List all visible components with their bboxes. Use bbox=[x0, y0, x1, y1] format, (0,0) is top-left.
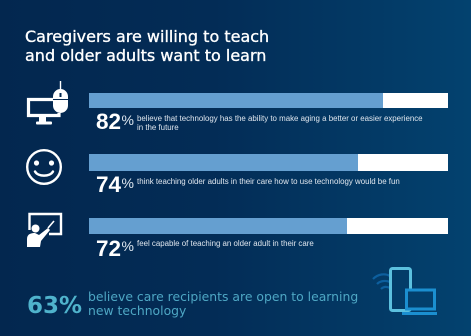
stat row 3 bbox=[89, 218, 448, 260]
callout text: new technology bbox=[88, 303, 186, 318]
stat row 2 bbox=[89, 154, 448, 197]
description bbox=[137, 114, 423, 132]
callout text: believe care recipients are open to learning bbox=[88, 289, 358, 304]
description: in the future bbox=[137, 123, 179, 132]
description: think teaching older adults in their care how to use technology would be fun bbox=[137, 177, 400, 186]
icon: teacher at board bbox=[27, 212, 62, 247]
bar 74% bbox=[89, 154, 448, 171]
bar 82% bbox=[89, 93, 448, 108]
title bbox=[25, 27, 269, 65]
icon: computer and mouse bbox=[26, 81, 68, 124]
value 82%: 82 bbox=[96, 108, 121, 134]
title: and older adults want to learn bbox=[25, 46, 266, 65]
description: feel capable of teaching an older adult in their care bbox=[137, 239, 314, 248]
stat row 1 bbox=[89, 93, 448, 134]
percent sign: % bbox=[122, 238, 134, 254]
percent sign: % bbox=[122, 112, 134, 128]
value 72%: 72 bbox=[96, 236, 121, 260]
title: Caregivers are willing to teach bbox=[25, 27, 269, 46]
big stat 63%: 63% bbox=[27, 293, 82, 319]
bar 72% bbox=[89, 218, 448, 234]
icon: phone, tablet and wifi bbox=[372, 267, 437, 315]
icon: smiley face bbox=[26, 149, 62, 185]
callout text bbox=[88, 289, 358, 318]
description: believe that technology has the ability to make aging a better or easier experience bbox=[137, 114, 423, 122]
value 74%: 74 bbox=[96, 172, 121, 197]
percent sign: % bbox=[122, 175, 134, 191]
